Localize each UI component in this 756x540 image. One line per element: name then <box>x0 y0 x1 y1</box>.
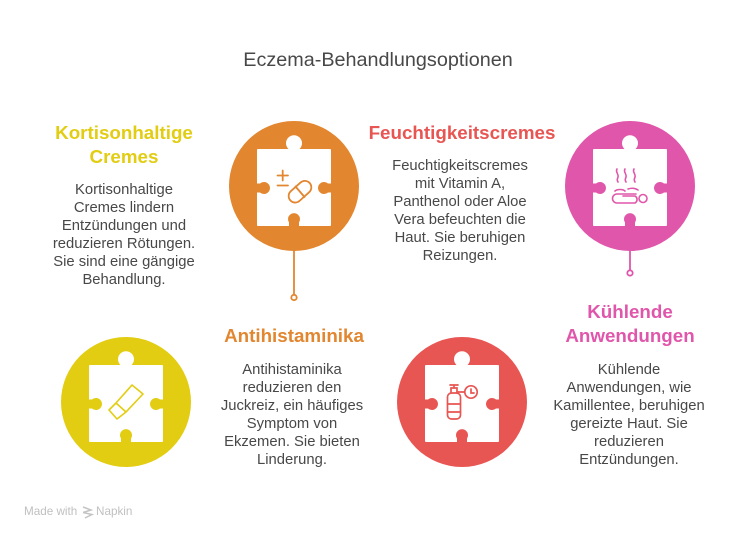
text: Feuchtigkeitscremes: Panthenol oder Aloe <box>393 194 527 210</box>
heading: Kühlende Anwendungen: Anwendungen <box>565 325 695 346</box>
text: Feuchtigkeitscremes: Reizungen. <box>423 248 497 264</box>
text: Feuchtigkeitscremes: Haut. Sie beruhigen <box>395 230 525 246</box>
heading: Kortisonhaltige Cremes: Cremes <box>90 146 158 167</box>
text: Kühlende Anwendungen: Entzündungen. <box>579 452 679 468</box>
icon: steam and person on towel <box>612 169 647 203</box>
text: Antihistaminika: Juckreiz, ein häufiges <box>221 398 363 414</box>
text: Kortisonhaltige Cremes: Cremes lindern <box>74 200 174 216</box>
text: Antihistaminika: Symptom von <box>247 416 337 432</box>
heading: Kortisonhaltige Cremes: Kortisonhaltige <box>55 122 193 143</box>
text: Antihistaminika: Antihistaminika <box>242 362 342 378</box>
text: Antihistaminika: reduzieren den <box>243 380 341 396</box>
icon: plus-minus and pill <box>278 170 314 205</box>
text: Kühlende Anwendungen: gereizte Haut. Sie <box>570 416 688 432</box>
text: Kühlende Anwendungen <box>553 362 705 468</box>
heading: Kühlende Anwendungen: Kühlende <box>587 301 673 322</box>
text: Kühlende Anwendungen: Kühlende <box>598 362 660 378</box>
text: Feuchtigkeitscremes <box>392 158 528 264</box>
text: Kortisonhaltige Cremes: Entzündungen und <box>62 218 186 234</box>
text: Feuchtigkeitscremes: Vera befeuchten die <box>394 212 526 228</box>
title: Eczema-Behandlungsoptionen <box>243 49 513 71</box>
icon: Napkin logo <box>83 507 92 518</box>
text: Feuchtigkeitscremes: Feuchtigkeitscremes <box>392 158 528 174</box>
text: Kühlende Anwendungen: reduzieren <box>594 434 664 450</box>
text: Kortisonhaltige Cremes <box>53 182 195 288</box>
text: Kortisonhaltige Cremes: reduzieren Rötungen. <box>53 236 195 252</box>
heading: Kortisonhaltige Cremes <box>55 122 193 167</box>
text: Kortisonhaltige Cremes: Sie sind eine gängige <box>53 254 195 270</box>
text: Kortisonhaltige Cremes: Kortisonhaltige <box>75 182 173 198</box>
text: Antihistaminika: Ekzemen. Sie bieten <box>224 434 360 450</box>
footer: Made with Napkin: Napkin <box>96 505 132 518</box>
heading: Feuchtigkeitscremes: Feuchtigkeitscremes <box>369 122 555 143</box>
text: Kühlende Anwendungen: Kamillentee, beruhigen <box>553 398 705 414</box>
text: Feuchtigkeitscremes: mit Vitamin A, <box>415 176 505 192</box>
heading: Kühlende Anwendungen <box>565 301 695 346</box>
heading: Antihistaminika: Antihistaminika <box>224 325 364 346</box>
footer: Made with Napkin <box>24 505 132 518</box>
text: Antihistaminika: Linderung. <box>257 452 327 468</box>
text: Kühlende Anwendungen: Anwendungen, wie <box>566 380 692 396</box>
red puzzle node <box>397 337 527 467</box>
icon: spray bottle with clock <box>448 385 477 419</box>
footer: Made with Napkin: Made with <box>24 505 77 518</box>
text: Kortisonhaltige Cremes: Behandlung. <box>82 272 166 288</box>
yellow puzzle node <box>61 337 191 467</box>
text: Antihistaminika <box>221 362 363 468</box>
orange puzzle node <box>229 121 359 300</box>
icon: cream tube <box>109 385 143 419</box>
pink puzzle node <box>565 121 695 276</box>
